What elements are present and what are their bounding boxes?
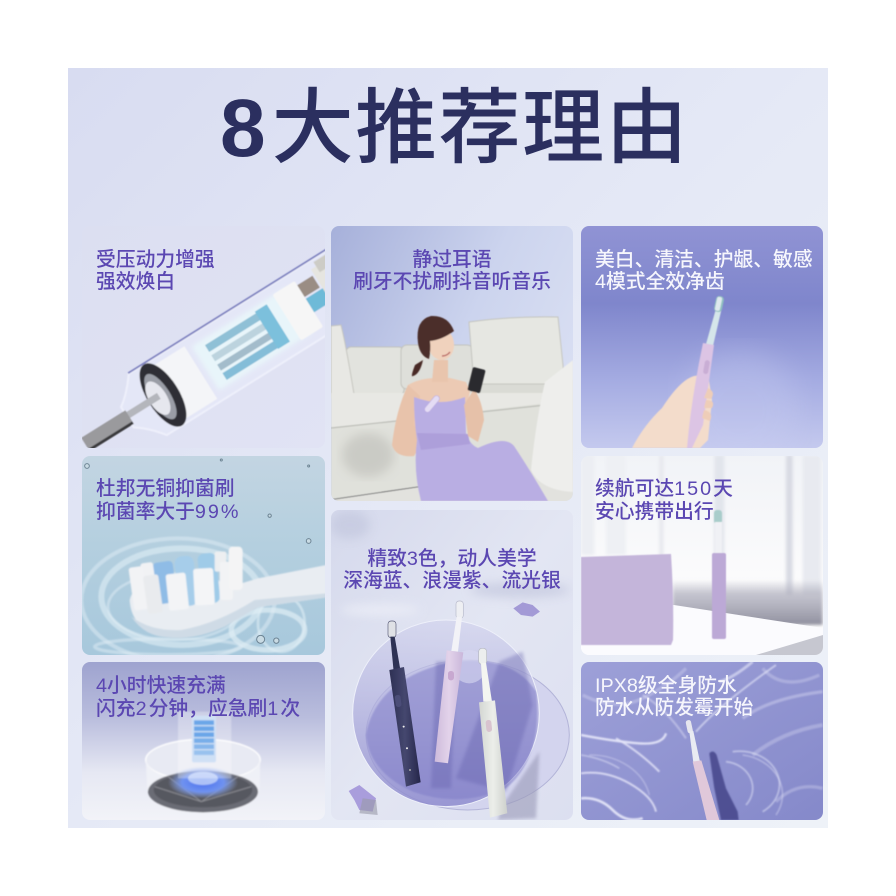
panel: fast charging: [82, 662, 325, 820]
panel: antibacterial bristles: [81, 456, 326, 662]
illustration: brush head: [128, 547, 326, 638]
text: 续航可达150天: [595, 478, 733, 500]
toothbrush in hand: [424, 395, 440, 412]
panel: four modes: [581, 226, 823, 470]
illustration: sofa: [331, 317, 573, 505]
background square: [68, 68, 828, 828]
illustration: toothbrush standing: [712, 510, 726, 639]
text: 安心携带出行: [595, 501, 714, 523]
text: 防水从防发霉开始: [595, 697, 753, 719]
illustration: hand holding toothbrush: [632, 295, 725, 448]
text: 美白、清洁、护龈、敏感: [595, 249, 813, 271]
text: [343, 548, 561, 592]
text: 抑菌率大于99%: [96, 501, 241, 523]
illustration: purple crystals: [349, 602, 540, 815]
illustration: woman with phone: [392, 316, 548, 501]
illustration: curtains: [581, 455, 823, 625]
text: 精致3色，动人美学: [367, 548, 537, 570]
text: [595, 478, 733, 523]
illustration: floating toothbrush: [685, 720, 739, 820]
text: 4模式全效净齿: [595, 271, 725, 293]
illustration: blanket: [531, 360, 573, 492]
illustration: pouch: [581, 554, 673, 645]
text: [96, 675, 300, 720]
panel: battery life: [581, 455, 823, 655]
text: 杜邦无铜抑菌刷: [96, 478, 234, 500]
text: 4小时快速充满: [96, 675, 226, 697]
illustration: toothbrush cutaway: [82, 248, 325, 448]
text: [595, 249, 813, 293]
text: 静过耳语: [412, 249, 492, 271]
text: 深海蓝、浪漫紫、流光银: [343, 570, 561, 592]
title: 8大推荐理由: [220, 83, 689, 174]
illustration: water caustics: [581, 662, 823, 820]
text: 闪充2分钟，应急刷1次: [96, 698, 300, 720]
illustration: water droplets: [85, 459, 311, 643]
text: [595, 675, 753, 719]
text: [96, 249, 215, 293]
text: [353, 249, 551, 293]
text: 强效焕白: [96, 271, 175, 293]
panel: waterproof: [581, 662, 823, 820]
illustration: water ripples: [81, 538, 305, 662]
text: IPX8级全身防水: [595, 675, 737, 697]
text: 刷牙不扰刷抖音听音乐: [353, 271, 551, 293]
illustration: glass discs: [353, 620, 569, 820]
illustration: pink toothbrush: [435, 601, 463, 763]
text: [96, 478, 241, 523]
panel: pressure power: [82, 248, 325, 448]
illustration: navy toothbrush: [388, 621, 421, 787]
panel: three colours: [330, 510, 573, 820]
illustration: silver toothbrush: [479, 648, 507, 818]
phone: [467, 367, 486, 393]
marble streaks: [330, 511, 570, 616]
illustration: charging base: [146, 712, 260, 814]
panel: quiet: [331, 226, 573, 505]
illustration: table: [672, 605, 814, 627]
text: 受压动力增强: [96, 249, 215, 271]
